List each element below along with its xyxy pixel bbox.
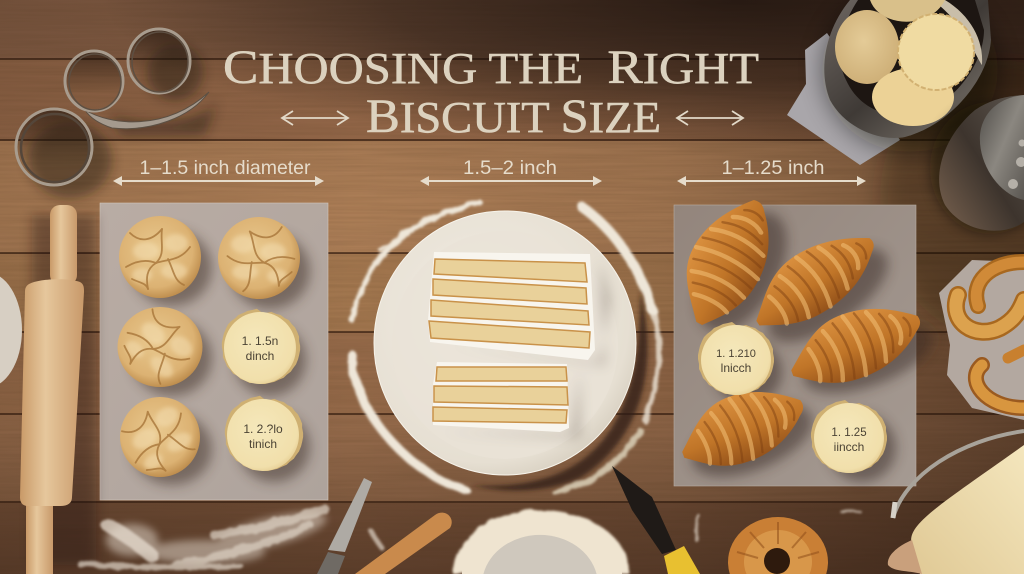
baked biscuit top right: [218, 217, 300, 299]
bowl edge: [0, 272, 22, 388]
labelled biscuit 1.210: lnicch: [721, 361, 751, 375]
whisk wire: [893, 431, 1024, 518]
flour ring around plate: [352, 203, 659, 492]
labelled biscuit 1.2: [225, 396, 303, 471]
right parchment with pastries: [663, 185, 941, 492]
title line 2: BISCUIT SIZE: [366, 90, 661, 143]
labelled biscuit 1.210: [698, 322, 774, 395]
dimension label: small size: 1–1.5 inch diameter: [140, 158, 311, 179]
cutter ribbon: [85, 92, 209, 129]
cake shadows: [440, 260, 610, 438]
dimension label: small size: [113, 158, 324, 186]
title arrows: [282, 111, 743, 125]
metal cookie cutters: [16, 29, 218, 198]
plate with cake slices: [374, 211, 636, 475]
dimension label: medium size: [420, 158, 602, 186]
rolling pin left: [20, 205, 96, 574]
flour circle with dish: [453, 510, 629, 574]
tin: [824, 0, 991, 138]
tin cookies: [870, 0, 945, 22]
yellow handled knife: [612, 466, 700, 574]
croissant two: [738, 216, 890, 345]
labelled biscuit 1.210: 1. 1.210: [716, 348, 756, 360]
upper cake slice: [428, 252, 595, 360]
labelled biscuit 1.5: 1. 1.5n: [242, 334, 278, 348]
labelled biscuit 1.25: [811, 400, 887, 473]
tissue paper: [787, 33, 900, 165]
title line 1: CHOOSING THE RIGHT: [223, 41, 759, 94]
biscuit shadows: [132, 230, 310, 485]
cutter small: [65, 51, 123, 111]
rolling pin bottom right: [888, 445, 1024, 574]
croissant four: [670, 374, 815, 482]
labelled biscuit 1.25: iincch: [834, 440, 864, 454]
croissant three: [779, 290, 931, 400]
ring pastry bottom: [728, 517, 828, 574]
cutter medium: [128, 29, 190, 93]
baked biscuit middle left: [113, 304, 202, 391]
ring pastry upper: [956, 262, 1024, 332]
croissant one: [663, 185, 792, 338]
pastry shadows: [679, 197, 941, 492]
wooden tool handle: [355, 513, 452, 574]
dimension label: large size: [677, 158, 866, 186]
labelled biscuit 1.25: 1. 1.25: [831, 427, 867, 439]
left parchment with biscuits: [100, 203, 328, 500]
baked biscuit top left: [119, 216, 201, 298]
ring pastries on paper: [939, 260, 1024, 420]
labelled biscuit 1.2: 1. 2.?lo: [243, 422, 283, 436]
lower cake slice: [433, 362, 569, 432]
title: [223, 41, 759, 143]
labelled biscuit 1.2: tinich: [249, 437, 277, 451]
dimension label: large size: 1–1.25 inch: [722, 158, 824, 179]
plate shadow: [470, 290, 648, 491]
bottom flour scatter: [80, 504, 860, 567]
ring pastry lower: [976, 350, 1024, 408]
cutter large: [16, 109, 92, 185]
canister knobs: [1008, 140, 1024, 189]
knife steel: [317, 478, 372, 574]
biscuit tin with cookies: [787, 0, 998, 165]
baked biscuit bottom left: [117, 397, 202, 482]
soft flour haze: [106, 504, 330, 564]
dimension label: medium size: 1.5–2 inch: [463, 158, 557, 179]
labelled biscuit 1.5: [222, 309, 300, 384]
metal canister: [930, 95, 1024, 234]
flour wisps: [80, 510, 860, 567]
labelled biscuit 1.5: dinch: [246, 349, 274, 363]
